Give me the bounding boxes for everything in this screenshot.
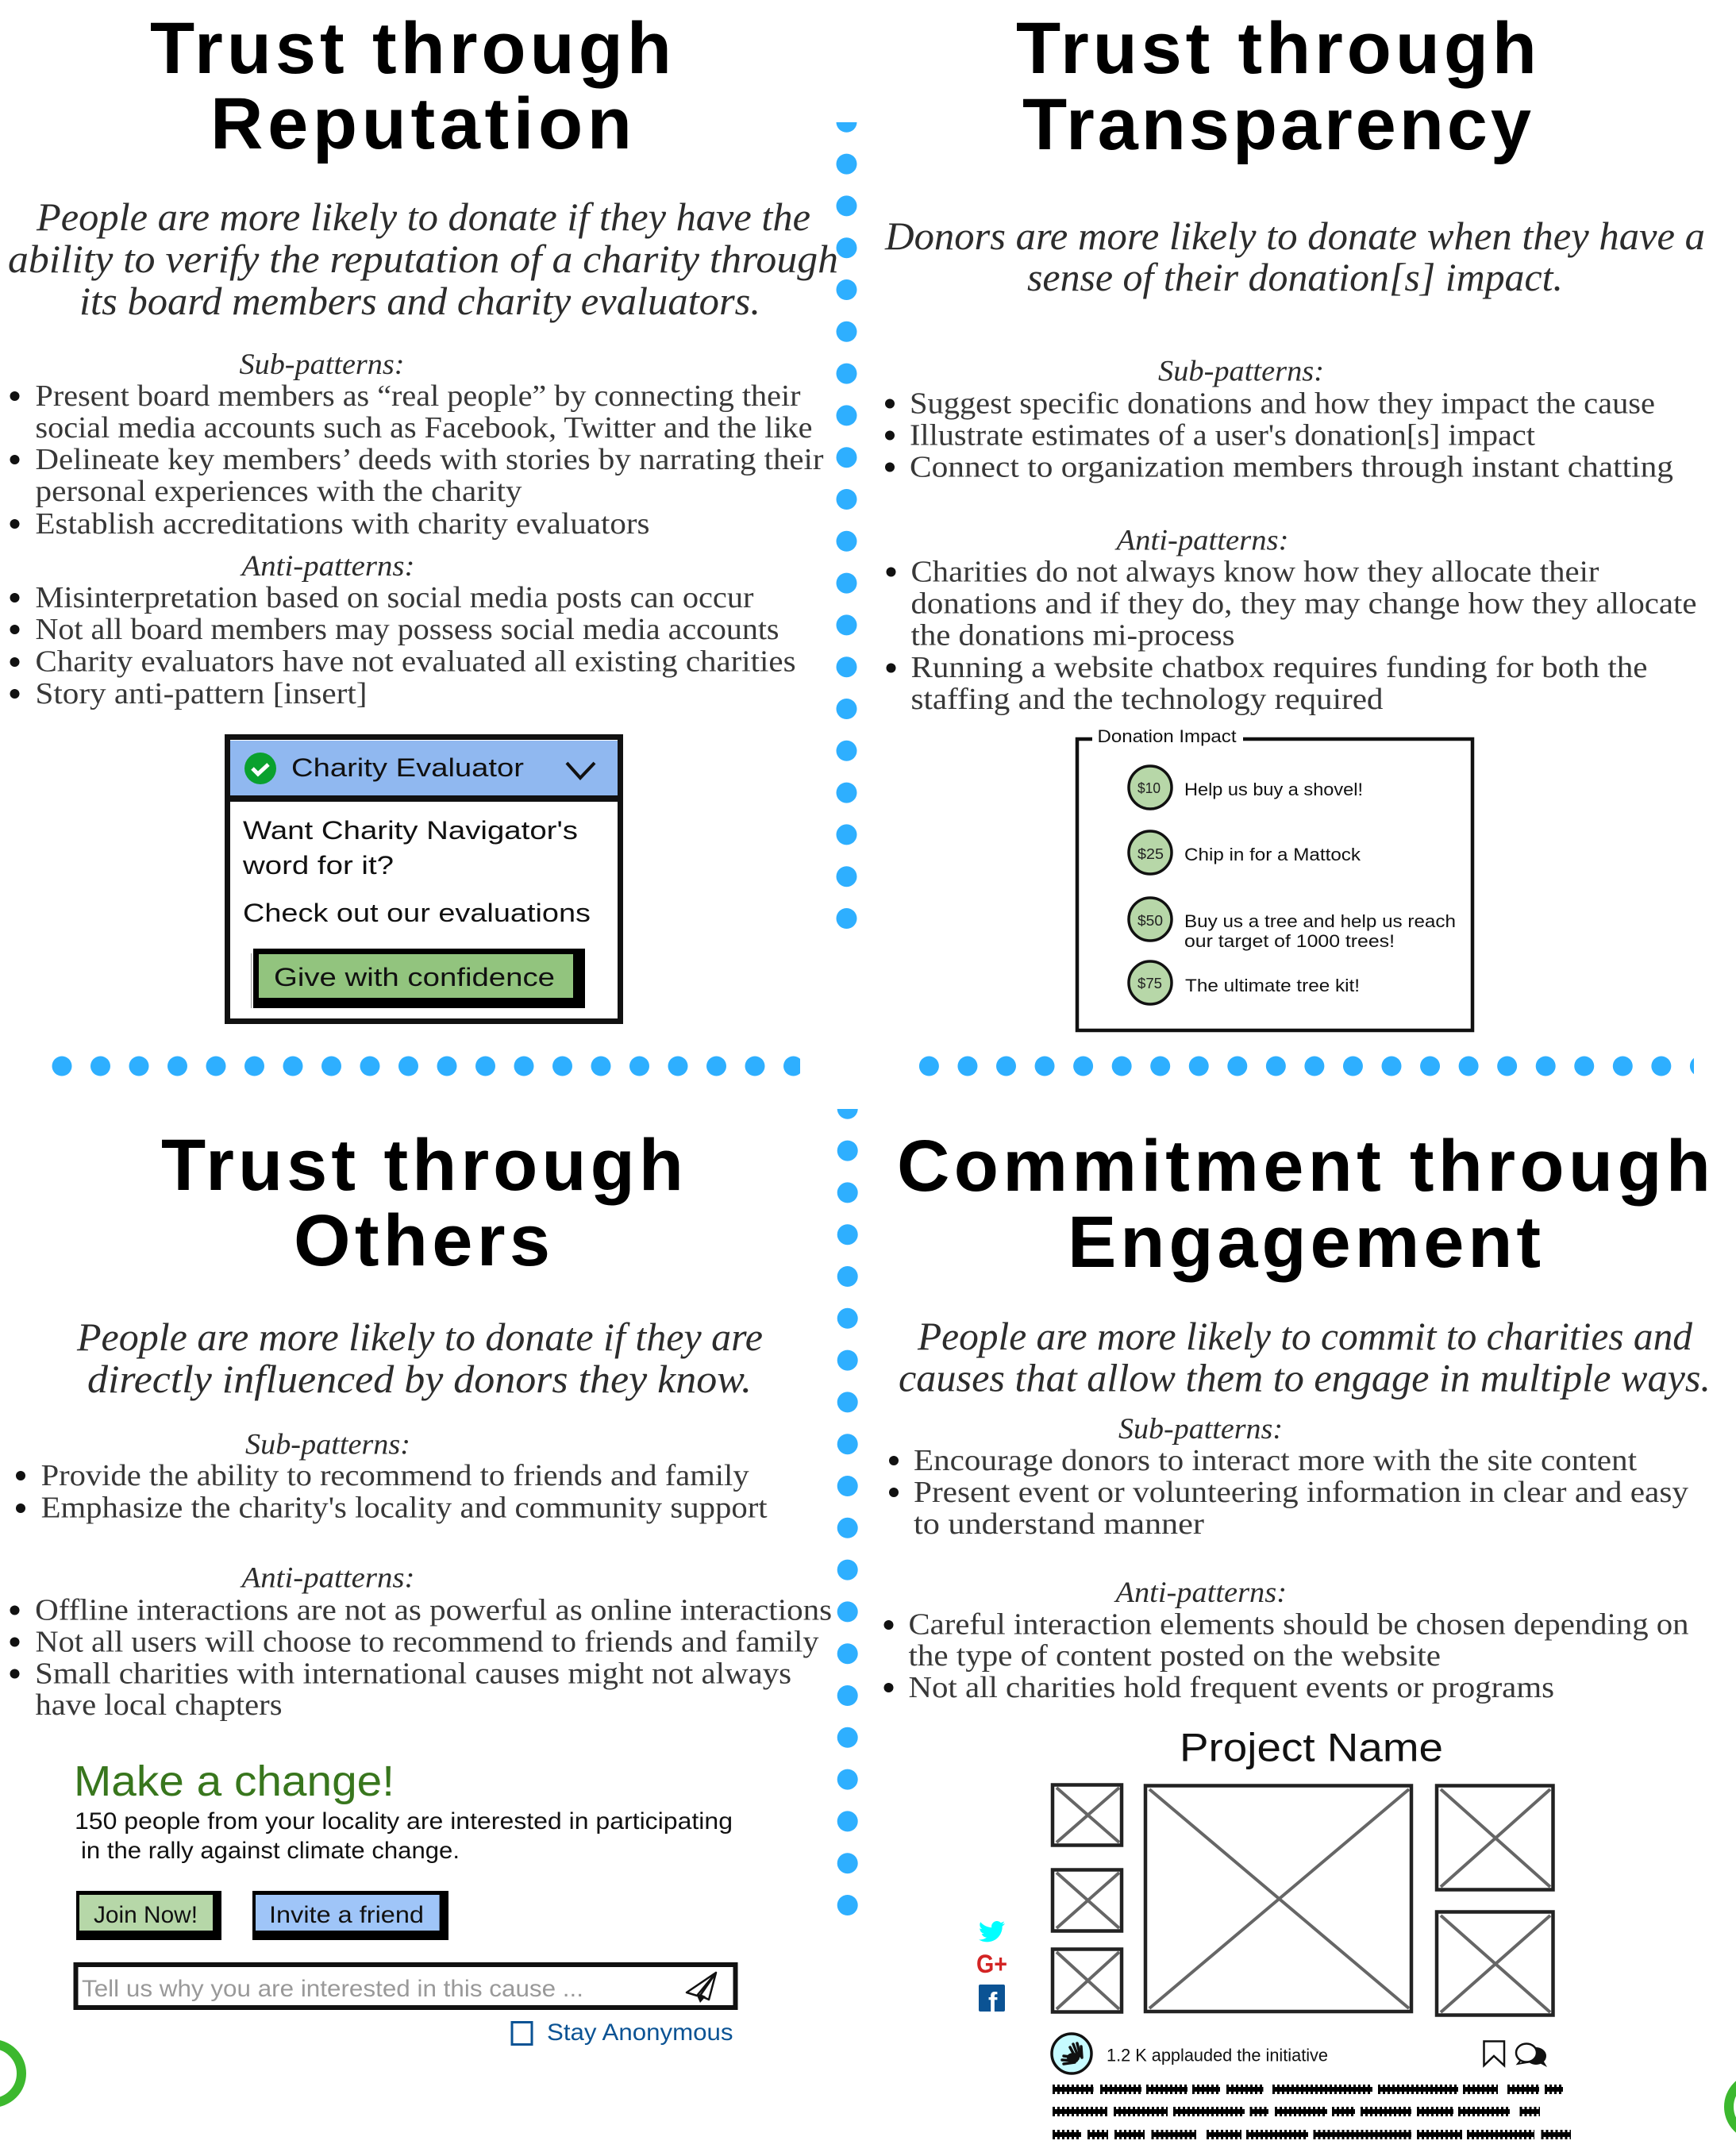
title xyxy=(150,8,672,164)
sub-patterns list: Encourage donors to interact more with the site content xyxy=(914,1444,1637,1477)
sub-patterns list: personal experiences with the charity xyxy=(35,475,522,508)
anti-patterns list: Misinterpretation based on social media posts can occur xyxy=(35,581,754,614)
sub-patterns list: Sub-patterns: xyxy=(245,1429,410,1461)
anti-patterns list: donations and if they do, they may change how they allocate xyxy=(911,587,1697,621)
sub-patterns list: Connect to organization members through instant chatting xyxy=(910,451,1673,484)
sub-patterns list: Establish accreditations with charity evaluators xyxy=(35,507,649,541)
anti-patterns list: Not all users will choose to recommend to friends and family xyxy=(35,1626,819,1659)
comment input: Tell us why you are interested in this cause ... xyxy=(82,1976,583,2002)
title: Transparency xyxy=(1022,84,1531,165)
intro statement xyxy=(76,1315,763,1401)
wireframe: charity evaluator widget: Check out our evaluations xyxy=(243,899,591,927)
wireframe: make a change xyxy=(74,1758,735,2046)
panel: Trust through Transparency xyxy=(884,8,1705,1030)
anti-patterns list: Careful interaction elements should be chosen depending on xyxy=(908,1608,1689,1642)
title: Reputation xyxy=(210,83,632,164)
donation option: $25: $25 xyxy=(1137,846,1164,862)
dotted divider: vertical lower xyxy=(837,1109,858,1906)
sub-patterns list xyxy=(885,356,1673,484)
sub-patterns list: Illustrate estimates of a user's donation[s] impact xyxy=(910,419,1535,452)
anti-patterns list: Running a website chatbox requires funding for both the xyxy=(911,651,1648,684)
intro statement: causes that allow them to engage in multiple ways. xyxy=(899,1355,1711,1399)
stay anonymous checkbox: Stay Anonymous xyxy=(547,2019,733,2046)
sub-patterns list: Sub-patterns: xyxy=(1118,1413,1283,1446)
anti-patterns list: Charities do not always know how they allocate their xyxy=(911,556,1599,589)
wireframe: donation impact: Donation Impact xyxy=(1097,726,1237,746)
icon: clapping hands xyxy=(1052,2034,1091,2073)
donation option: $75: $75 xyxy=(1137,976,1162,991)
intro statement: Donors are more likely to donate when they have a xyxy=(884,214,1705,258)
decorative green ring: bottom left xyxy=(0,2044,21,2103)
title xyxy=(1016,8,1537,165)
icon: chevron xyxy=(567,763,595,778)
title: Others xyxy=(294,1200,550,1281)
sub-patterns list: Delineate key members’ deeds with stories by narrating their xyxy=(35,443,824,476)
anti-patterns list: Small charities with international causes might not always xyxy=(35,1657,791,1691)
donation option: $25: Chip in for a Mattock xyxy=(1184,845,1361,864)
title: Commitment through xyxy=(897,1126,1711,1207)
sub-patterns list: Provide the ability to recommend to friends and family xyxy=(41,1459,749,1492)
sub-patterns list xyxy=(889,1413,1688,1541)
icon: paper plane xyxy=(687,1973,716,2003)
sub-patterns list: Present event or volunteering information in clear and easy xyxy=(914,1476,1688,1509)
sub-patterns list: Present board members as “real people” by connecting their xyxy=(35,379,801,413)
anti-patterns list: have local chapters xyxy=(35,1688,283,1722)
dotted divider: horizontal left xyxy=(62,1056,800,1076)
intro statement: People are more likely to donate if they have the xyxy=(36,194,810,239)
title: Trust through xyxy=(1016,8,1537,89)
sub-patterns list: Suggest specific donations and how they impact the cause xyxy=(910,387,1655,421)
donation option: $25 xyxy=(1129,831,1361,874)
applause row xyxy=(1052,2034,1547,2073)
sub-patterns list: Sub-patterns: xyxy=(1158,356,1324,387)
description text: in the rally against climate change. xyxy=(81,1838,460,1864)
button: invite a friend xyxy=(252,1891,448,1940)
anti-patterns list: Offline interactions are not as powerful as online interactions xyxy=(35,1594,832,1627)
heading: project name: Project Name xyxy=(1180,1726,1443,1770)
donation option: $50: Buy us a tree and help us reach xyxy=(1184,911,1456,931)
sub-patterns list: Sub-patterns: xyxy=(240,348,405,381)
intro statement xyxy=(8,194,838,323)
donation option: $50 xyxy=(1129,898,1456,951)
wireframe: charity evaluator widget xyxy=(225,737,623,1021)
wireframe: donation impact xyxy=(1077,726,1472,1030)
applause row: 1.2 K applauded the initiative xyxy=(1107,2046,1328,2066)
heading: make a change: Make a change! xyxy=(74,1758,395,1805)
anti-patterns list: Anti-patterns: xyxy=(1113,1577,1287,1609)
donation option: $10 xyxy=(1129,766,1363,809)
icon: bookmark xyxy=(1484,2042,1504,2066)
title: Engagement xyxy=(1068,1202,1541,1283)
anti-patterns list: Anti-patterns: xyxy=(1114,524,1289,557)
wireframe: charity evaluator widget: word for it? xyxy=(242,851,394,880)
description text xyxy=(75,1808,733,1864)
donation option: $10: $10 xyxy=(1137,780,1161,796)
wireframe: charity evaluator widget: Charity Evaluator xyxy=(291,753,524,782)
panel: Trust through Reputation xyxy=(8,8,838,1021)
title xyxy=(897,1126,1711,1283)
anti-patterns list xyxy=(884,1577,1689,1704)
icon: google plus: G+ xyxy=(976,1950,1007,1978)
panel: Commitment through Engagement xyxy=(884,1126,1711,2135)
wireframe: project page xyxy=(976,1726,1571,2135)
intro statement: directly influenced by donors they know. xyxy=(87,1357,752,1401)
icon: facebook: f xyxy=(988,1988,998,2018)
intro statement: ability to verify the reputation of a charity through xyxy=(8,237,838,281)
button: give with confidence: Give with confidence xyxy=(274,963,555,991)
icon: facebook xyxy=(979,1985,1005,2018)
anti-patterns list xyxy=(10,550,796,710)
sub-patterns list xyxy=(10,348,824,541)
title: Trust through xyxy=(161,1125,683,1206)
description text: 150 people from your locality are interested in participating xyxy=(75,1808,733,1835)
intro statement xyxy=(884,214,1705,299)
anti-patterns list: Anti-patterns: xyxy=(239,1562,414,1594)
anti-patterns list: the donations mi-process xyxy=(911,619,1235,653)
intro statement: sense of their donation[s] impact. xyxy=(1027,255,1563,299)
comment input xyxy=(76,1965,735,2008)
icon: chat bubbles xyxy=(1516,2043,1547,2067)
intro statement xyxy=(899,1314,1711,1399)
donation option: $75 xyxy=(1129,961,1360,1004)
sub-patterns list: Emphasize the charity's locality and community support xyxy=(41,1492,768,1525)
dotted divider: vertical upper xyxy=(837,122,857,919)
intro statement: People are more likely to donate if they are xyxy=(76,1315,763,1359)
button: join now xyxy=(76,1891,221,1940)
icon: twitter xyxy=(979,1921,1005,1942)
placeholder cross lines xyxy=(1057,1788,1550,2012)
button: invite a friend: Invite a friend xyxy=(269,1902,424,1928)
donation option: $50: our target of 1000 trees! xyxy=(1184,931,1395,951)
button: give with confidence xyxy=(251,949,585,1008)
icon: green check xyxy=(244,753,276,784)
intro statement: its board members and charity evaluators. xyxy=(79,279,760,323)
sub-patterns list: social media accounts such as Facebook, Twitter and the like xyxy=(35,411,813,445)
title xyxy=(161,1125,683,1281)
anti-patterns list xyxy=(10,1562,832,1722)
donation option: $10: Help us buy a shovel! xyxy=(1184,780,1363,799)
intro statement: People are more likely to commit to charities and xyxy=(917,1314,1693,1358)
sub-patterns list xyxy=(16,1429,768,1525)
anti-patterns list: Anti-patterns: xyxy=(239,550,414,583)
anti-patterns list: Story anti-pattern [insert] xyxy=(35,677,368,710)
wireframe: charity evaluator widget: Want Charity Navigator's xyxy=(243,816,578,845)
title: Trust through xyxy=(150,8,672,89)
anti-patterns list: Charity evaluators have not evaluated all existing charities xyxy=(35,645,796,678)
anti-patterns list: Not all charities hold frequent events or programs xyxy=(908,1671,1554,1704)
anti-patterns list: staffing and the technology required xyxy=(911,683,1383,716)
donation option: $75: The ultimate tree kit! xyxy=(1185,976,1360,995)
decorative green ring: bottom right xyxy=(1729,2077,1736,2136)
anti-patterns list: Not all board members may possess social media accounts xyxy=(35,613,779,646)
button: join now: Join Now! xyxy=(94,1902,198,1928)
anti-patterns list: the type of content posted on the website xyxy=(908,1639,1441,1673)
panel: Trust through Others xyxy=(10,1125,832,2046)
donation option: $50: $50 xyxy=(1137,913,1163,929)
dotted divider: horizontal right xyxy=(929,1056,1715,1076)
image placeholders xyxy=(1053,1784,1553,2015)
anti-patterns list xyxy=(886,524,1697,716)
sub-patterns list: to understand manner xyxy=(914,1507,1204,1541)
scribbled text lines xyxy=(1053,2089,1571,2135)
